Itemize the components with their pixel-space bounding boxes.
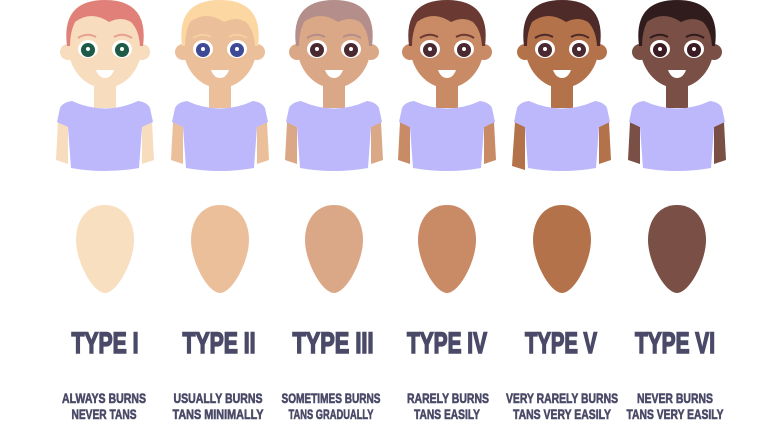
person: type VI <box>628 0 726 171</box>
person: type II <box>171 0 269 171</box>
person: type I <box>56 0 154 171</box>
type titles: TYPE VI <box>635 327 715 360</box>
descriptions: TANS GRADUALLY <box>288 406 374 422</box>
person: type V <box>512 0 611 171</box>
type titles: TYPE V <box>525 327 597 360</box>
descriptions: TANS MINIMALLY <box>172 406 264 422</box>
person: type IV <box>398 0 496 171</box>
type titles: TYPE IV <box>407 327 487 360</box>
type titles: TYPE III <box>292 327 374 360</box>
descriptions: TANS VERY EASILY <box>513 406 611 422</box>
descriptions: SOMETIMES BURNS <box>282 390 380 406</box>
swatches <box>76 205 706 293</box>
descriptions: USUALLY BURNS <box>174 390 262 406</box>
type titles: TYPE I <box>72 327 138 360</box>
type titles <box>72 327 715 360</box>
descriptions: NEVER TANS <box>72 406 136 422</box>
descriptions: TANS EASILY <box>414 406 480 422</box>
person: type III <box>285 0 383 171</box>
descriptions <box>62 390 724 422</box>
descriptions: ALWAYS BURNS <box>62 390 146 406</box>
descriptions: RARELY BURNS <box>407 390 489 406</box>
type titles: TYPE II <box>182 327 256 360</box>
descriptions: TANS VERY EASILY <box>626 406 724 422</box>
descriptions: VERY RARELY BURNS <box>506 390 618 406</box>
descriptions: NEVER BURNS <box>637 390 713 406</box>
